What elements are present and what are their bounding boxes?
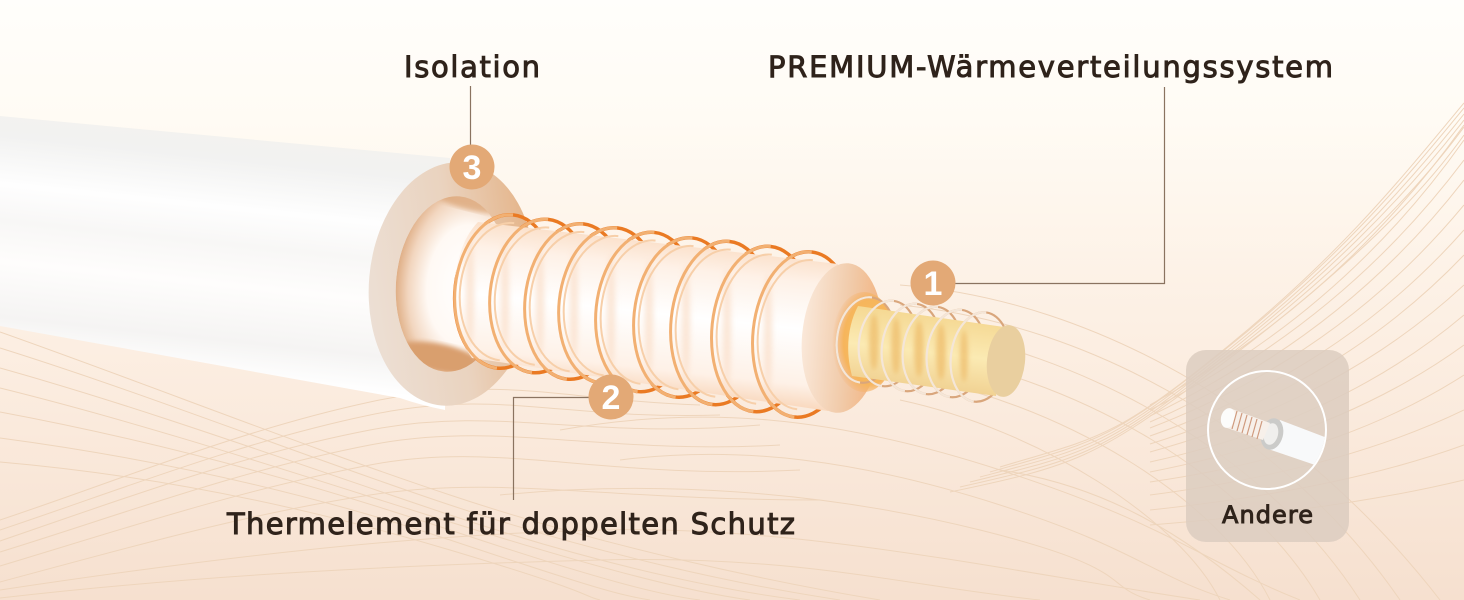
outer white insulated tube	[0, 116, 450, 410]
core end face	[983, 323, 1029, 399]
badge 3: 3	[463, 149, 481, 187]
cylinder end face	[796, 260, 888, 416]
inner bore of insulation	[396, 196, 496, 372]
badge 1: 1	[924, 265, 942, 303]
inner cylinder	[454, 222, 838, 411]
label: premium heat distribution system: PREMIUM-Wärmeverteilungssystem	[768, 50, 1333, 84]
label: thermal element: Thermelement für doppelten Schutz	[226, 507, 795, 541]
comparison circle with mini cable	[1208, 371, 1330, 489]
label: Isolation: Isolation	[404, 50, 540, 84]
copper coil rear arcs	[447, 210, 861, 422]
badge 1	[910, 260, 956, 306]
leader line 1	[954, 87, 1164, 284]
leader line 3	[470, 86, 472, 146]
badge 2	[588, 374, 634, 420]
small coil front arcs	[831, 293, 986, 402]
badge 2: 2	[602, 379, 620, 417]
coil inner reflections	[453, 218, 813, 409]
badge 3	[450, 144, 494, 190]
leader line 2	[514, 398, 591, 500]
core conductor	[848, 306, 1004, 396]
copper coil front arcs	[447, 210, 812, 417]
small coil rear arcs	[831, 293, 1015, 406]
insulation end face	[359, 155, 545, 413]
soft bands on cylinder	[466, 237, 772, 394]
core glow	[832, 292, 896, 392]
comparison panel: other product	[1186, 350, 1349, 542]
panel label: Andere	[1222, 501, 1313, 529]
core shading bands	[869, 314, 968, 382]
